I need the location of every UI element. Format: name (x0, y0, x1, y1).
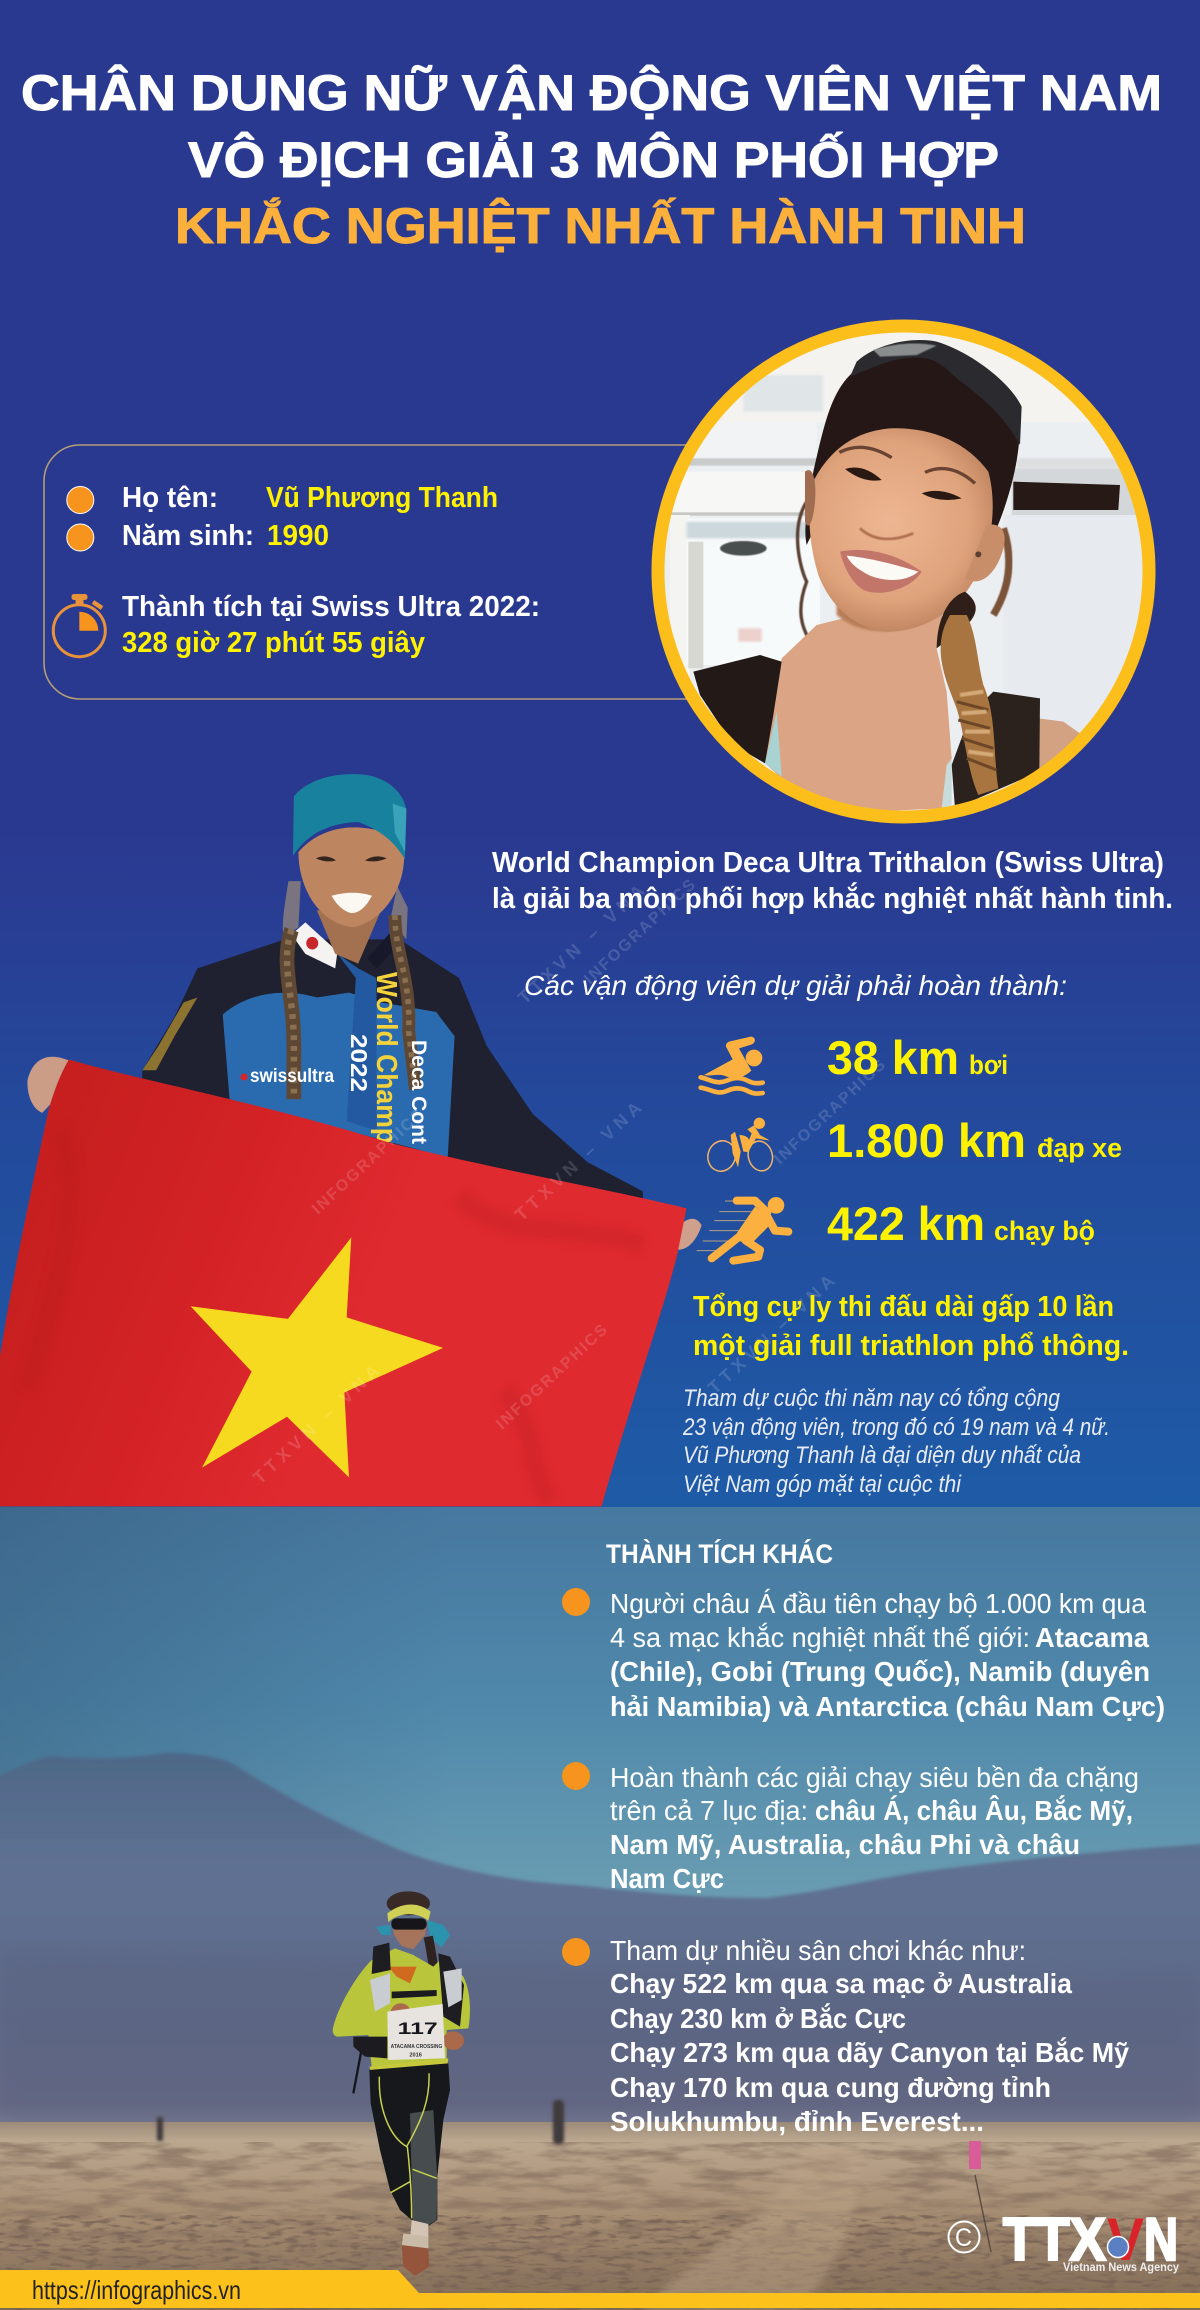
participants note: 23 vận động viên, trong đó có 19 nam và 4 nữ. (682, 1414, 1110, 1441)
distant figures (157, 2100, 564, 2144)
achievement 2 text: Nam Cực (610, 1863, 724, 1894)
flag (0, 1060, 686, 1506)
logo TTXVN: TTX (1003, 2206, 1106, 2273)
icon: bullet (562, 1762, 590, 1790)
birth value: 1990 (267, 520, 329, 552)
achievement 3 text: Tham dự nhiều sân chơi khác như: (610, 1935, 1026, 1966)
hands (27, 1057, 69, 1113)
flag star (191, 1237, 443, 1477)
logo TTXVN: Vietnam News Agency (1063, 2260, 1179, 2274)
braid (937, 592, 976, 648)
watermarks: TTXVN – VNA (511, 1098, 645, 1225)
achievement 1 (562, 1588, 1165, 1722)
achievement 1 text: (Chile), Gobi (Trung Quốc), Namib (duyên (610, 1656, 1150, 1687)
icon: bullet name (67, 486, 94, 514)
footer band (0, 2270, 1200, 2308)
race bib: 2016 (409, 2053, 422, 2059)
section heading: THÀNH TÍCH KHÁC (606, 1538, 833, 1569)
intro text: là giải ba môn phối hợp khắc nghiệt nhất hành tinh. (492, 881, 1173, 915)
bag straps (693, 655, 782, 763)
achievement 3 text: Solukhumbu, đỉnh Everest... (610, 2106, 984, 2137)
achievement 1 text: hải Namibia) và Antarctica (châu Nam Cực) (610, 1691, 1165, 1722)
brows and eyes (839, 447, 892, 458)
achievement 3 text: Chạy 273 km qua dãy Canyon tại Bắc Mỹ (610, 2037, 1129, 2068)
name label: Họ tên: (122, 482, 218, 514)
icon: cycling (704, 1118, 776, 1175)
watermarks: INFOGRAPHICS (309, 1106, 427, 1218)
headband (293, 774, 406, 859)
watermarks (249, 876, 889, 1488)
achievement 3 text: Chạy 170 km qua cung đường tỉnh (610, 2072, 1051, 2103)
runner jacket (333, 1948, 470, 2067)
name value: Vũ Phương Thanh (266, 482, 498, 514)
watermarks: TTXVN – VNA (514, 881, 648, 1008)
achievement label: Thành tích tại Swiss Ultra 2022: (122, 591, 540, 623)
race bib: ATACAMA CROSSING (391, 2044, 443, 2050)
icon: swimming (701, 1037, 763, 1094)
icon: bullet birth year (67, 524, 94, 551)
achievement 3 text (610, 1935, 1129, 2137)
copyright mark (948, 2222, 980, 2252)
subheading: Các vận động viên dự giải phải hoàn thành: (524, 970, 1067, 1001)
title: VÔ ĐỊCH GIẢI 3 MÔN PHỐI HỢP (188, 131, 999, 188)
race bib (387, 2004, 445, 2060)
face (809, 428, 993, 632)
achievement time: 328 giờ 27 phút 55 giây (122, 627, 425, 659)
swim distance: bơi (969, 1050, 1008, 1080)
website: https://infographics.vn (32, 2275, 241, 2305)
achievement 1 text (610, 1588, 1165, 1722)
watermarks: INFOGRAPHICS (581, 876, 699, 988)
collar (292, 922, 337, 968)
logo TTXVN: N (1144, 2206, 1178, 2273)
logo TTXVN: V (1107, 2206, 1144, 2273)
intro text (492, 847, 1173, 915)
face (298, 827, 404, 927)
cycling distance (827, 1114, 1122, 1167)
hair (805, 348, 1020, 545)
mouth (840, 550, 922, 593)
achievement 3 text: Chạy 230 km ở Bắc Cực (610, 2003, 906, 2034)
hair (283, 881, 408, 939)
icon: bullet (562, 1588, 590, 1616)
logo TTXVN (1003, 2206, 1179, 2274)
participants note: Vũ Phương Thanh là đại diện duy nhất của (683, 1442, 1081, 1469)
achievement 3 text: Chạy 522 km qua sa mạc ở Australia (610, 1968, 1072, 1999)
icon: bullet (562, 1938, 590, 1966)
icon: stopwatch (53, 594, 105, 657)
achievement 2 (562, 1762, 1139, 1894)
achievement 2 text: trên cả 7 lục địa: (610, 1795, 808, 1826)
title: KHẮC NGHIỆT NHẤT HÀNH TINH (175, 198, 1026, 254)
watermarks: INFOGRAPHICS (771, 1056, 889, 1168)
total distance note: Tổng cự ly thi đấu dài gấp 10 lần (693, 1291, 1114, 1323)
race bib: 117 (398, 2019, 438, 2038)
sunglasses (850, 340, 1022, 445)
intro text: World Champion Deca Ultra Trithalon (Swiss Ultra) (492, 847, 1164, 879)
athlete with flag photo (0, 774, 702, 1506)
running distance (827, 1197, 1095, 1250)
achievement 1 text: Atacama (1035, 1622, 1149, 1653)
braids (287, 930, 294, 1099)
title: CHÂN DUNG NỮ VẬN ĐỘNG VIÊN VIỆT NAM (21, 64, 1162, 121)
achievement 2 text: châu Á, châu Âu, Bắc Mỹ, (815, 1795, 1133, 1826)
jacket lettering: 2022 (346, 1034, 372, 1092)
leggings (369, 2063, 450, 2226)
birth label: Năm sinh: (122, 520, 254, 552)
participants note: Tham dự cuộc thi năm nay có tổng cộng (683, 1385, 1061, 1412)
desert photo (0, 1507, 1200, 2310)
achievement 2 text: Hoàn thành các giải chạy siêu bền đa chặng (610, 1762, 1139, 1793)
achievement 2 text: Nam Mỹ, Australia, châu Phi và châu (610, 1829, 1080, 1860)
jacket lettering: Deca Cont (407, 1040, 430, 1144)
jacket lettering: World Champ (370, 972, 402, 1144)
achievement 3 (562, 1935, 1129, 2137)
achievement 1 text: 4 sa mạc khắc nghiệt nhất thế giới: (610, 1622, 1030, 1653)
background (0, 0, 1200, 1510)
mountains (0, 1753, 1200, 2140)
cycling distance: đạp xe (1037, 1133, 1122, 1163)
participants note: Việt Nam góp mặt tại cuộc thi (683, 1471, 962, 1498)
achievement 2 text (610, 1762, 1139, 1894)
title (21, 64, 1162, 254)
portrait photo (650, 315, 1160, 825)
watermarks: TTXVN – VNA (704, 1271, 838, 1398)
nose (860, 528, 913, 539)
runner (333, 1891, 470, 2276)
jacket (138, 939, 643, 1245)
total distance note (693, 1291, 1129, 1362)
desert ground (0, 2122, 1200, 2310)
swim distance: 38 km (827, 1031, 959, 1084)
icon: running (697, 1197, 788, 1261)
watermarks: INFOGRAPHICS (493, 1321, 611, 1433)
total distance note: một giải full triathlon phổ thông. (693, 1330, 1129, 1362)
running distance: chạy bộ (994, 1216, 1095, 1246)
running distance: 422 km (827, 1197, 985, 1250)
copyright mark: C (955, 2224, 972, 2252)
jacket lettering: swissultra (250, 1066, 334, 1087)
course marker (969, 2141, 991, 2252)
watermarks: TTXVN – VNA (249, 1361, 383, 1488)
neck (317, 910, 381, 964)
shoe (410, 2220, 428, 2240)
participants note (682, 1385, 1110, 1498)
achievement 1 text: Người châu Á đầu tiên chạy bộ 1.000 km qua (610, 1588, 1146, 1619)
panel: athlete details (44, 445, 804, 699)
neck and chest (765, 608, 952, 812)
cycling distance: 1.800 km (827, 1114, 1026, 1167)
jacket lettering (240, 972, 430, 1144)
